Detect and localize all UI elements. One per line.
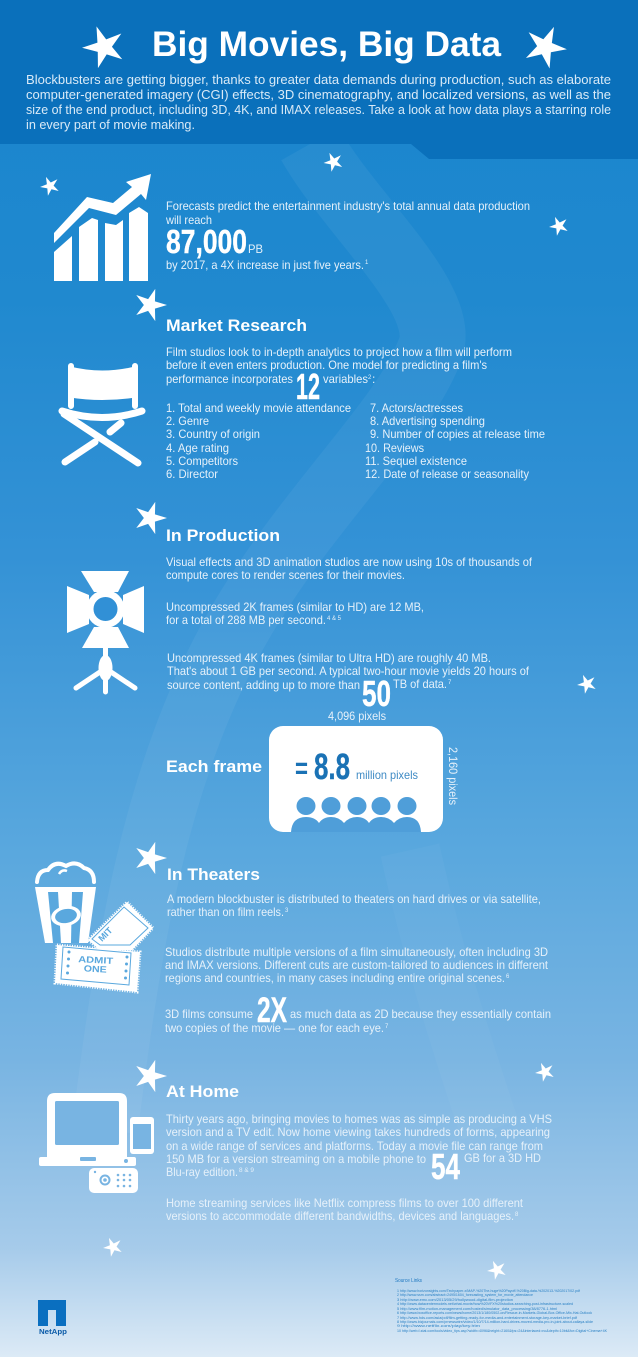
- theaters text 2: and IMAX versions. Different cuts are custom-tailored to audiences in different: [165, 958, 549, 972]
- variable list right: 8. Advertising spending: [370, 414, 485, 428]
- at home text 2: 8: [515, 1212, 519, 1218]
- theaters text 1: A modern blockbuster is distributed to theaters on hard drives or via satellite,: [167, 892, 541, 906]
- at home text 1: 150 MB for a version streaming on a mobile phone to: [166, 1152, 426, 1166]
- at home text 1: GB for a 3D HD: [464, 1151, 541, 1165]
- icon: director's chair: [62, 366, 142, 463]
- icon: in production star: [136, 502, 167, 534]
- production text 3: 7: [448, 680, 452, 686]
- production text 3: source content, adding up to more than: [167, 678, 360, 692]
- label: frame height: 2,160 pixels: [446, 747, 460, 805]
- theaters text 3: [165, 991, 551, 1035]
- variable list right: 7. Actors/actresses: [370, 401, 463, 415]
- icon: title star left: [77, 17, 134, 74]
- production text 1: compute cores to render scenes for their movies.: [166, 568, 405, 582]
- background film strip: [105, 144, 490, 1130]
- theaters text 3: 7: [385, 1024, 389, 1030]
- theaters text 1: 3: [285, 908, 289, 914]
- icon: market research star: [136, 289, 167, 321]
- forecast text block: Forecasts predict the entertainment industry's total annual data production: [166, 199, 530, 213]
- source links: 8 http://www.bizjournals.com/prnewswire/video/1/10/7/14-million-hard-drives-moved-media-pro-in-joint-about-callaya-slide: [397, 1319, 594, 1324]
- label: frame width: 4,096 pixels: [328, 709, 386, 723]
- at home text 2: Home streaming services like Netflix compress films to over 100 different: [166, 1196, 524, 1210]
- market research intro: performance incorporates: [166, 372, 293, 386]
- frame screen graphic: =: [295, 752, 308, 785]
- variable list right: 10. Reviews: [365, 441, 424, 455]
- production text 1: [166, 555, 533, 582]
- forecast text block: by 2017, a 4X increase in just five years.: [166, 258, 364, 272]
- icon: popcorn and tickets: MIT: [96, 925, 115, 943]
- variable list left: 2. Genre: [166, 414, 209, 428]
- market research intro: Film studios look to in-depth analytics to project how a film will perform: [166, 345, 512, 359]
- intro text: Blockbusters are getting bigger, thanks to greater data demands during production, such as elaborate: [26, 72, 611, 87]
- theaters text 2: [165, 945, 549, 985]
- source links: 9 http://www.netflix.com/play/key.htm: [397, 1323, 481, 1328]
- production text 1: Visual effects and 3D animation studios are now using 10s of thousands of: [166, 555, 533, 569]
- at home text 2: [166, 1196, 524, 1223]
- theaters text 2: 6: [506, 974, 510, 980]
- variable list right: 11. Sequel existence: [365, 454, 467, 468]
- icon: stage light: [67, 571, 144, 692]
- at home text 2: versions to accommodate different bandwidths, devices and languages.: [166, 1209, 514, 1223]
- theaters text 3: 2X: [257, 991, 287, 1030]
- at home text 1: version and a TV edit. Now home viewing takes hundreds of forms, appearing: [166, 1125, 550, 1139]
- forecast text block: 1: [365, 260, 369, 266]
- heading: in production: In Production: [166, 526, 280, 545]
- source links: 2 http://www.ssrn.com/abstract=2495/1604_forecasting_system_for_movie_attendance: [397, 1292, 534, 1297]
- icon: at home star: [136, 1060, 167, 1092]
- frame screen graphic: [269, 726, 443, 832]
- forecast text block: [165, 199, 530, 272]
- market research intro: before it even enters production. One model for predicting a film's: [166, 358, 487, 372]
- theaters text 3: two copies of the movie — one for each eye.: [165, 1021, 384, 1035]
- variable list right: 12. Date of release or seasonality: [365, 467, 529, 481]
- heading: market research: Market Research: [166, 316, 307, 335]
- production text 3: Uncompressed 4K frames (similar to Ultra HD) are roughly 40 MB.: [167, 651, 491, 665]
- icon: popcorn and tickets: ADMIT: [78, 954, 114, 966]
- at home text 1: 54: [431, 1146, 460, 1187]
- market research intro: [166, 345, 512, 407]
- production text 2: [166, 600, 424, 627]
- intro text: size of the end product, including 3D, 4K, and IMAX releases. Take a look at how data plays a starring role: [26, 102, 611, 117]
- source links: 4 http://www.datacentermodels.net/what-movie/how%20VFX%20studios-searching-post-infrastructure-scaled: [397, 1301, 573, 1306]
- source links: 5 http://www.film-motion-management.com/hosted/simulator_data_processing/38/8776-1.html: [397, 1306, 557, 1311]
- variable list right: [365, 401, 545, 481]
- market research intro: variables: [323, 372, 368, 386]
- theaters text 1: rather than on film reels.: [167, 905, 284, 919]
- heading: at home: At Home: [166, 1082, 239, 1101]
- netapp logo: NetApp: [39, 1327, 67, 1336]
- source links: 3 http://www.emc.com/2013/05/29/hollywood-digital-film-projection: [397, 1297, 513, 1302]
- production text 3: That's about 1 GB per second. A typical two-hour movie yields 20 hours of: [167, 664, 530, 678]
- frame screen graphic: million pixels: [356, 768, 418, 782]
- theaters text 2: regions and countries, in many cases including entire original scenes.: [165, 971, 505, 985]
- intro text: [26, 72, 611, 132]
- icon: growth chart: [54, 174, 151, 281]
- at home text 1: Blu-ray edition.: [166, 1165, 238, 1179]
- production text 3: TB of data.: [393, 677, 447, 691]
- variable list right: 9. Number of copies at release time: [370, 427, 545, 441]
- variable list left: 1. Total and weekly movie attendance: [166, 401, 351, 415]
- frame screen graphic: 8.8: [314, 746, 350, 787]
- source links: [395, 1278, 607, 1333]
- heading: in theaters: In Theaters: [167, 865, 260, 884]
- netapp logo: [38, 1300, 67, 1336]
- icon: in theaters star: [136, 842, 167, 874]
- at home text 1: 8 & 9: [239, 1168, 255, 1174]
- theaters text 3: 3D films consume: [165, 1007, 253, 1021]
- market research intro: 12: [296, 366, 320, 407]
- icon: laptop, phone and remote: [39, 1093, 154, 1193]
- header band: [0, 0, 638, 159]
- production text 3: 50: [362, 673, 391, 714]
- at home text 1: Thirty years ago, bringing movies to homes was as simple as producing a VHS: [166, 1112, 552, 1126]
- intro text: in every part of movie making.: [26, 117, 195, 132]
- variable list left: 3. Country of origin: [166, 427, 260, 441]
- production text 3: [167, 651, 530, 714]
- market research intro: :: [372, 372, 375, 386]
- variable list left: [166, 401, 351, 481]
- icon: popcorn and tickets: ONE: [83, 963, 107, 975]
- market research intro: 2: [368, 375, 372, 381]
- icon: popcorn and tickets: [35, 863, 153, 992]
- source links: 7 http://www.hds.com/asia/pdf/film-getting-ready-for-media-and-entertainment-storage-key-market-brief.pdf: [397, 1315, 578, 1320]
- variable list left: 6. Director: [166, 467, 218, 481]
- production text 2: for a total of 288 MB per second.: [166, 613, 326, 627]
- theaters text 2: Studios distribute multiple versions of a film simultaneously, often including 3D: [165, 945, 548, 959]
- variable list left: 4. Age rating: [166, 441, 229, 455]
- forecast text block: PB: [248, 242, 263, 256]
- source links: Source Links: [395, 1278, 422, 1284]
- production text 2: 4 & 5: [327, 616, 342, 622]
- icon: title star right: [525, 24, 569, 70]
- theaters text 1: [167, 892, 541, 919]
- theaters text 3: as much data as 2D because they essentially contain: [290, 1007, 551, 1021]
- label: each frame: Each frame: [166, 757, 262, 776]
- forecast text block: will reach: [165, 213, 212, 227]
- variable list left: 5. Competitors: [166, 454, 238, 468]
- title: Big Movies, Big Data: [152, 25, 502, 64]
- intro text: computer-generated imagery (CGI) effects, 3D cinematography, and localized versions, as well as the: [26, 87, 611, 102]
- source links: 10 http://web.f-stat.com/tools/video_tips.asp?width=4096&height=2160&fps=24&interlaced=no&depth=10bit&for=Digital+Cinema+4K: [397, 1328, 607, 1333]
- source links: 1 http://www.horizonsights.com/Techpaper-x/MAP-%20The-huge%20Payoff-%20Big-data-%202013-%202017/02.pdf: [397, 1288, 581, 1293]
- forecast text block: 87,000: [166, 223, 247, 260]
- source links: 6 http://www.boxoffice-reports.com/news/home/2013/1/180/0502-on/Rescue-in-Markets-Global-Box-Office-Mix-Hat-Outlook: [397, 1310, 592, 1315]
- at home text 1: on a wide range of services and platforms. Today a movie file can range from: [166, 1139, 543, 1153]
- production text 2: Uncompressed 2K frames (similar to HD) are 12 MB,: [166, 600, 424, 614]
- at home text 1: [166, 1112, 552, 1187]
- decorative small stars: [38, 150, 600, 1283]
